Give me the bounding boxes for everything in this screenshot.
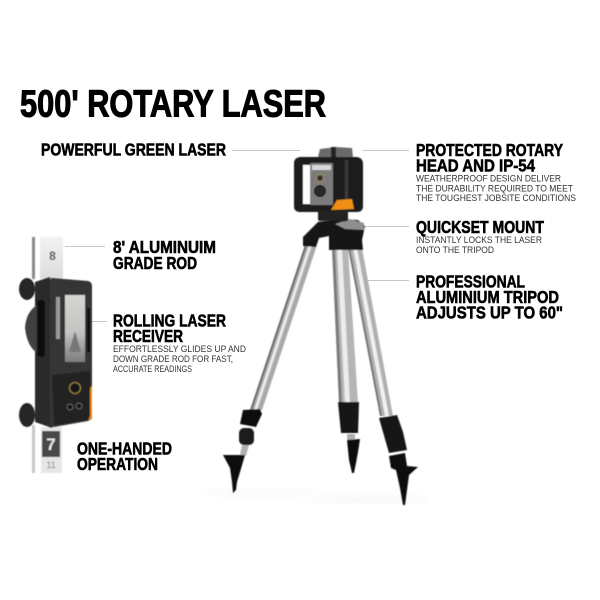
- callout: grade rod: GRADE ROD: [113, 253, 197, 273]
- mount base: [318, 211, 348, 221]
- callout: aluminium tripod: PROFESSIONAL: [416, 272, 525, 292]
- receiver display: [65, 295, 85, 362]
- orange base: [331, 199, 354, 210]
- front panel: [310, 163, 333, 205]
- rolling laser receiver: [19, 277, 92, 428]
- callout: quickset mount: INSTANTLY LOCKS THE LASER: [416, 235, 542, 245]
- rotary laser: [294, 147, 363, 221]
- callout: quickset mount: QUICKSET MOUNT: [416, 217, 544, 237]
- callout: aluminium tripod: ADJUSTS UP TO 60": [416, 302, 563, 322]
- callout: rolling laser receiver: EFFORTLESSLY GLIDES UP AND: [113, 344, 246, 354]
- callout: grade rod: [65, 237, 216, 273]
- callout: rolling laser receiver: RECEIVER: [113, 326, 183, 346]
- rotary head top: [318, 147, 353, 157]
- callout: aluminium tripod: ALUMINIUM TRIPOD: [416, 287, 559, 307]
- callout: quickset mount: [365, 217, 544, 255]
- callout: one-handed operation: ONE-HANDED: [77, 438, 172, 458]
- wheels: [19, 278, 35, 427]
- callout: protected rotary head: PROTECTED ROTARY: [416, 140, 563, 160]
- tripod head: [303, 219, 365, 250]
- callout: quickset mount: ONTO THE TRIPOD: [416, 245, 494, 255]
- callout: one-handed operation: [77, 438, 172, 474]
- callout: powerful green laser: POWERFUL GREEN LASER: [41, 140, 226, 160]
- callout: grade rod: 8' ALUMINUIM: [113, 237, 216, 257]
- callout: aluminium tripod: [364, 272, 563, 322]
- grade rod: 7: [46, 435, 56, 454]
- callout: one-handed operation: OPERATION: [77, 454, 158, 474]
- callout: protected rotary head: THE DURABILITY REQUIRED TO MEET: [416, 184, 573, 194]
- callout: protected rotary head: THE TOUGHEST JOBSITE CONDITIONS: [416, 193, 576, 203]
- callout: rolling laser receiver: DOWN GRADE ROD FOR FAST,: [113, 354, 233, 364]
- callout: protected rotary head: HEAD AND IP-54: [416, 156, 535, 176]
- receiver buttons: [70, 382, 80, 394]
- right leg: [348, 248, 418, 505]
- grade rod: 11: [46, 460, 56, 470]
- callout: protected rotary head: [362, 140, 576, 203]
- grade rod: [32, 237, 63, 473]
- callout: rolling laser receiver: ROLLING LASER: [113, 310, 226, 330]
- middle leg: [332, 248, 360, 473]
- callout: rolling laser receiver: [90, 310, 246, 374]
- callout: protected rotary head: WEATHERPROOF DESIGN DELIVER: [416, 174, 561, 184]
- title: 500' ROTARY LASER: [20, 84, 326, 126]
- tripod: [223, 219, 418, 505]
- left leg: [223, 245, 317, 493]
- grade rod: 8: [49, 249, 56, 263]
- ground shadow: [200, 490, 430, 503]
- laser frame: [294, 157, 363, 212]
- callout: rolling laser receiver: ACCURATE READINGS: [113, 364, 192, 374]
